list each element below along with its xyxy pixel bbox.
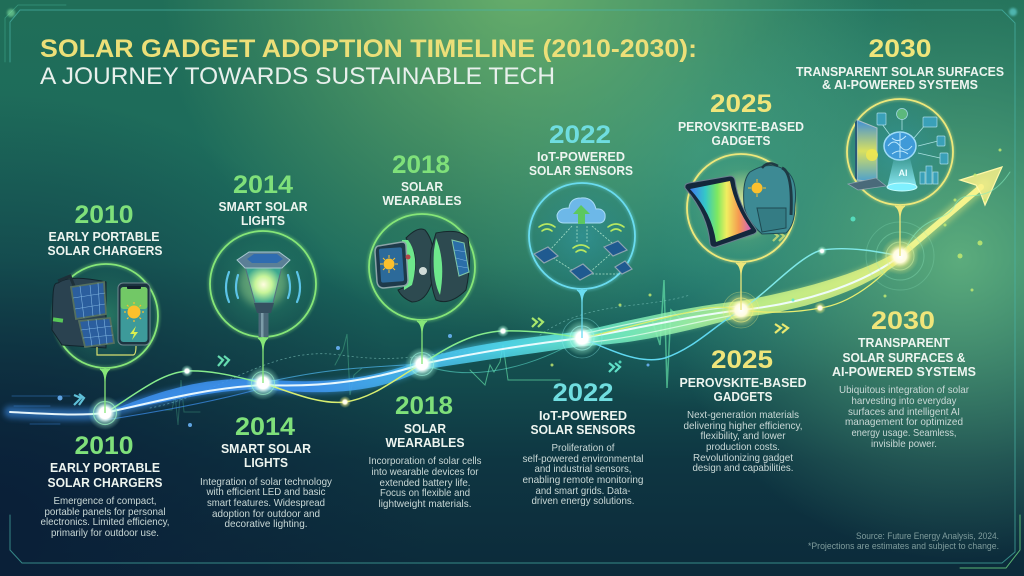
name 2018: SOLAR	[401, 180, 443, 194]
year 2018: 2018	[392, 151, 450, 179]
description 2018: Incorporation of solar cells	[368, 456, 482, 467]
source note: Source: Future Energy Analysis, 2024.	[856, 531, 999, 542]
description 2025: flexibility, and lower	[700, 431, 786, 442]
milestone 2018 upper	[369, 151, 475, 364]
description 2010: portable panels for personal	[44, 507, 166, 518]
icon: flexible tablet and backpack	[685, 154, 796, 310]
milestone 2030 upper	[796, 35, 1004, 256]
milestone 2030 upper: & AI-POWERED SYSTEMS	[822, 78, 978, 92]
milestone 2018 details	[368, 392, 482, 510]
source note	[808, 531, 999, 552]
description 2030	[839, 385, 970, 450]
year 2010: 2010	[74, 201, 134, 229]
description 2030: surfaces and intelligent AI	[848, 407, 960, 418]
name 2014: SMART SOLAR	[218, 200, 308, 214]
year 2030: 2030	[868, 35, 932, 63]
description 2022: and smart grids. Data-	[536, 486, 630, 497]
description 2030: harvesting into everyday	[852, 396, 957, 407]
description 2022: enabling remote monitoring	[522, 475, 644, 486]
description 2022: driven energy solutions.	[532, 496, 634, 507]
chevrons	[74, 232, 788, 405]
name 2025: PEROVSKITE-BASED	[680, 376, 806, 390]
description 2018: into wearable devices for	[372, 467, 479, 478]
milestone 2018 upper: WEARABLES	[382, 194, 462, 208]
year 2014: 2014	[233, 171, 293, 199]
year 2025: 2025	[711, 346, 773, 374]
milestone 2025 upper	[678, 90, 804, 310]
decorative pulse traces	[165, 280, 680, 425]
title line 1: SOLAR GADGET ADOPTION TIMELINE (2010-2030):	[40, 35, 697, 63]
timeline beam	[10, 167, 1010, 425]
description 2014: smart features. Widespread	[207, 498, 325, 509]
milestone 2010 upper	[48, 201, 162, 413]
description 2022: and industrial sensors,	[534, 464, 632, 475]
milestone 2018 details: WEARABLES	[386, 436, 464, 450]
main beam core	[10, 256, 900, 415]
year 2018: 2018	[395, 392, 453, 420]
description 2025: Revolutionizing gadget	[693, 453, 793, 464]
description 2010: primarily for outdoor use.	[51, 528, 159, 539]
year 2022: 2022	[552, 379, 614, 407]
name 2014: SMART SOLAR	[221, 442, 311, 456]
title	[40, 35, 697, 90]
milestone 2014 upper	[210, 171, 316, 383]
year 2030: 2030	[871, 307, 935, 335]
description 2018: lightweight materials.	[378, 499, 472, 510]
icon: transparent building and AI brain	[847, 99, 953, 256]
name 2018: SOLAR	[404, 422, 446, 436]
milestone 2014 details: LIGHTS	[244, 456, 288, 470]
milestone 2014 details	[200, 413, 333, 530]
icon: smart solar lamp	[210, 231, 316, 383]
description 2014: Integration of solar technology	[200, 477, 333, 488]
description 2022: Proliferation of	[552, 443, 615, 454]
name 2010: EARLY PORTABLE	[48, 230, 160, 244]
description 2025	[684, 410, 802, 474]
milestone 2010 upper: SOLAR CHARGERS	[48, 244, 162, 258]
description 2022: self-powered environmental	[522, 454, 644, 465]
description 2030: invisible power.	[871, 439, 937, 450]
description 2030: energy usage. Seamless,	[852, 428, 956, 439]
name 2022: IoT-POWERED	[539, 409, 627, 423]
source note: *Projections are estimates and subject to change.	[808, 541, 999, 552]
milestone 2022 upper	[529, 121, 635, 338]
description 2010: electronics. Limited efficiency,	[40, 517, 170, 528]
milestone 2010 details	[40, 432, 170, 539]
name 2022: IoT-POWERED	[537, 150, 625, 164]
milestone 2025 upper: GADGETS	[712, 134, 770, 148]
node rings	[94, 222, 934, 424]
beam glow	[10, 256, 900, 415]
description 2030: management for optimized	[845, 417, 963, 428]
year 2014: 2014	[235, 413, 295, 441]
description 2014: adoption for outdoor and	[212, 509, 320, 520]
main beam ribbon	[105, 250, 900, 413]
milestone 2030 details	[832, 307, 976, 450]
description 2025: production costs.	[706, 442, 780, 453]
label AI: AI	[898, 168, 908, 178]
secondary arcs	[105, 371, 263, 413]
year 2010: 2010	[74, 432, 134, 460]
milestone 2030 details: SOLAR SURFACES &	[842, 351, 966, 365]
milestone 2025 details	[680, 346, 806, 474]
description 2010: Emergence of compact,	[54, 496, 156, 507]
description 2025: design and capabilities.	[692, 463, 794, 474]
name 2030: TRANSPARENT SOLAR SURFACES	[796, 65, 1004, 79]
description 2025: delivering higher efficiency,	[684, 421, 802, 432]
growth arrow	[900, 167, 1010, 256]
title line 2: A JOURNEY TOWARDS SUSTAINABLE TECH	[40, 63, 555, 90]
description 2022	[522, 443, 644, 507]
icon: solar backpack and phone	[52, 264, 158, 413]
milestone 2010 details: SOLAR CHARGERS	[48, 476, 162, 490]
milestone 2030 details: AI-POWERED SYSTEMS	[832, 365, 976, 379]
icon: solar watch and band	[369, 214, 475, 364]
milestone 2025 details: GADGETS	[714, 390, 772, 404]
description 2025: Next-generation materials	[687, 410, 799, 421]
node glows	[88, 237, 919, 430]
milestone 2022 upper: SOLAR SENSORS	[529, 164, 633, 178]
node details and sparkles	[58, 148, 1002, 430]
description 2014: decorative lighting.	[224, 519, 308, 530]
icon: IoT cloud and sensors	[529, 183, 635, 338]
year 2025: 2025	[710, 90, 772, 118]
year 2022: 2022	[549, 121, 611, 149]
name 2010: EARLY PORTABLE	[50, 461, 160, 475]
description 2030: Ubiquitous integration of solar	[839, 385, 970, 396]
milestone 2022 details: SOLAR SENSORS	[530, 423, 636, 437]
name 2025: PEROVSKITE-BASED	[678, 120, 804, 134]
description 2018: Focus on flexible and	[380, 488, 470, 499]
description 2018: extended battery life.	[380, 478, 470, 489]
milestone 2022 details	[522, 379, 644, 507]
name 2030: TRANSPARENT	[858, 336, 950, 350]
description 2014	[200, 477, 333, 530]
description 2010	[40, 496, 170, 539]
description 2014: with efficient LED and basic	[206, 487, 326, 498]
milestone 2014 upper: LIGHTS	[241, 214, 285, 228]
description 2018	[368, 456, 482, 510]
